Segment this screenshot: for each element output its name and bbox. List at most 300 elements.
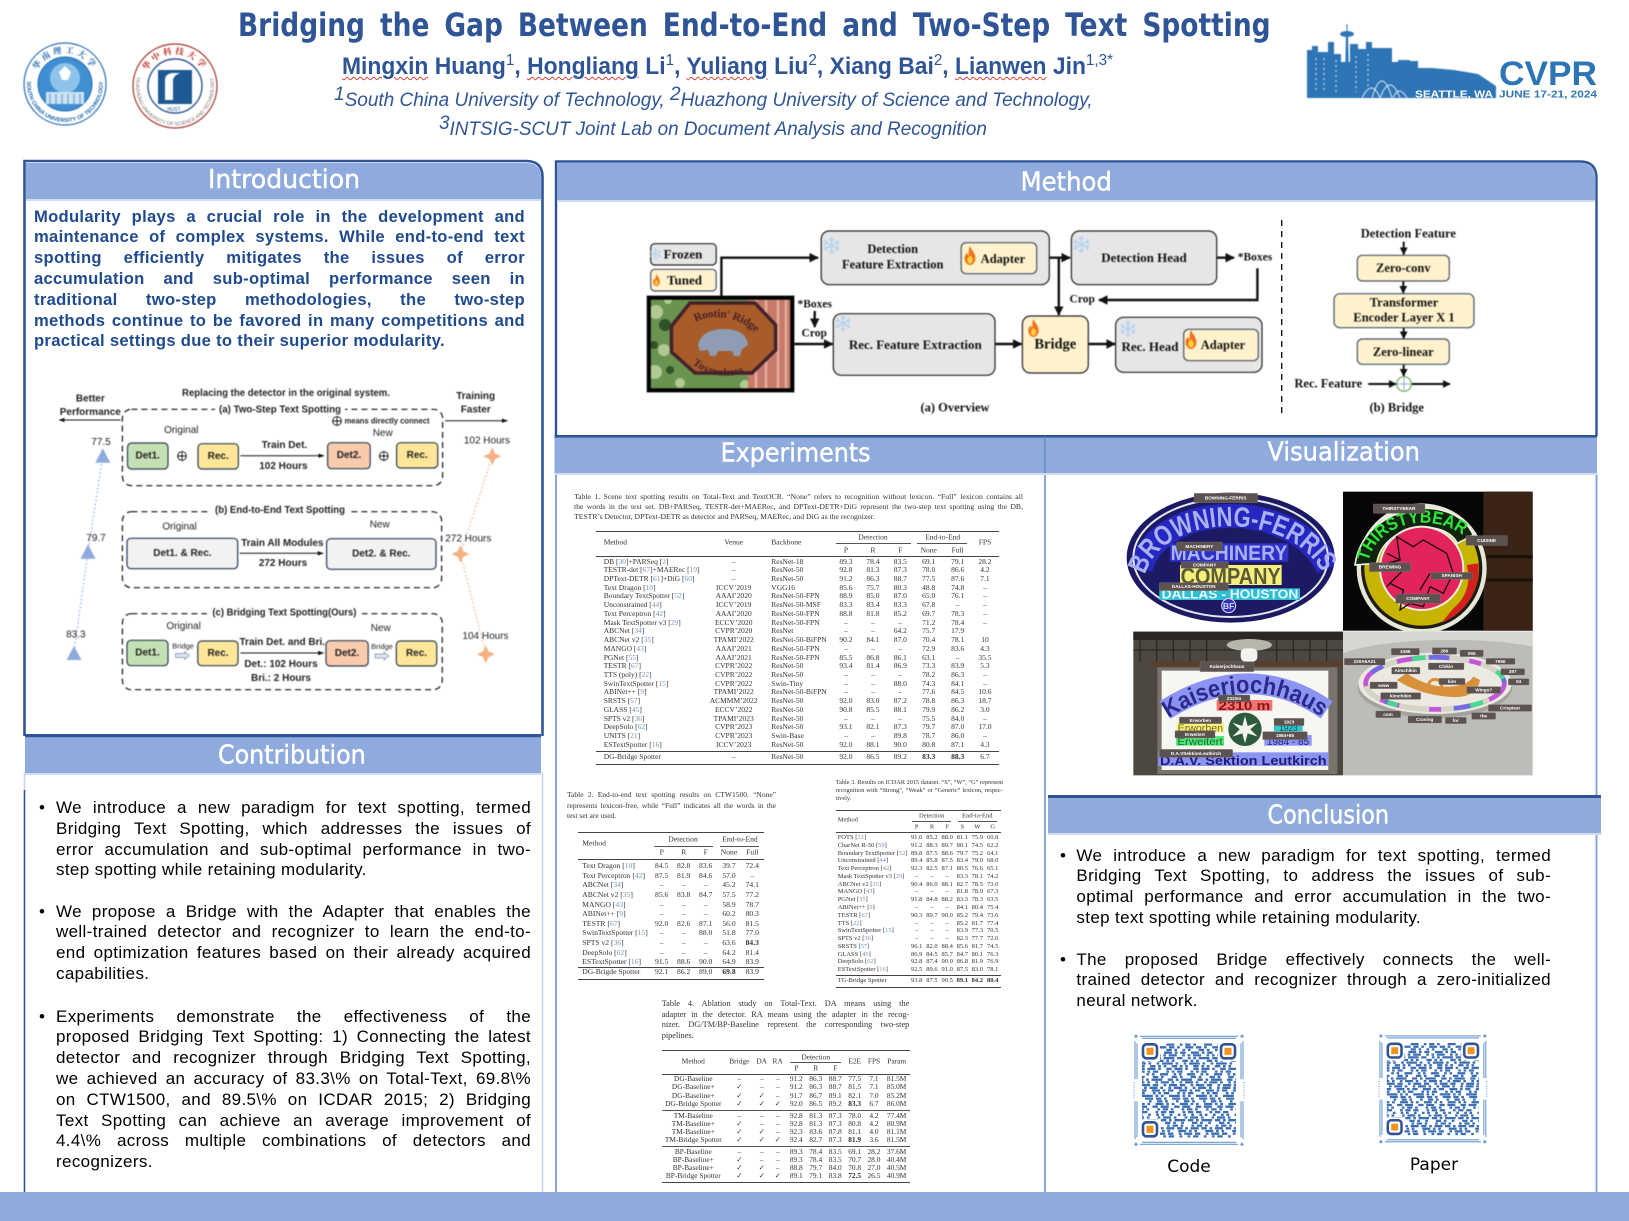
contribution bullet 1: • [39,798,45,817]
table 1: scene text spotting results: 87.0 [894,635,907,644]
detected labels: plate: Aimchikin [1395,668,1417,673]
table 3: ICDAR 2015 results: 68.0 [987,857,998,864]
heading: introduction: Introduction [208,165,360,195]
table 2: CTW1500 results: ESTextSpotter [16] [582,957,641,966]
table 1: scene text spotting results: – [732,557,736,566]
detected labels: plate: kim [1448,679,1456,684]
table 3: ICDAR 2015 results: GLASS [45] [838,951,871,958]
table 3: ICDAR 2015 results: 82.5 [926,865,938,872]
table 3: ICDAR 2015 results: 89.8 [911,850,922,857]
table 4: ablation study: DG-Baseline [674,1074,713,1083]
table 1: scene text spotting results: – [983,714,987,723]
table 1: scene text spotting results: TESTR’s Detector, DPText-DETR as detector and PARSeq, MAERec, and DiG as the recognizer. [574,512,875,521]
table 3: ICDAR 2015 results: 84.8 [926,896,938,903]
table 1: scene text spotting results: 89.2 [894,752,907,761]
table 4: ablation study: 86.7 [809,1091,822,1100]
table 3: ICDAR 2015 results: 96.1 [911,943,922,950]
table 4: ablation study: 26.5 [867,1171,880,1180]
table 1: scene text spotting results: 78.0 [922,565,935,574]
table 4: ablation study [662,999,910,1183]
table 1: scene text spotting results: – [732,752,736,761]
table 4: ablation study: DG-Baseline+ [672,1091,715,1100]
table 2: CTW1500 results: 63.6 [722,938,736,947]
table 2: CTW1500 results: 84.7 [699,890,712,899]
table 3: ICDAR 2015 results: – [915,873,918,880]
table 4: ablation study: 79.1 [809,1171,822,1180]
table 4: ablation study: 83.8 [829,1171,842,1180]
table 3: ICDAR 2015 results: Detection [919,812,944,820]
table 1: scene text spotting results: ESTextSpotter [16] [604,740,662,749]
table 4: ablation study: 81.5M [887,1074,906,1083]
caption: replacing the detector: Replacing the detector in the original system. [182,388,390,399]
table 4: ablation study: 91.7 [790,1091,803,1100]
table 4: ablation study: ✓ [759,1127,765,1136]
contribution bullet 2: end optimization features based on their already acquired [56,943,531,962]
table 4: ablation study: 28.2 [867,1147,880,1156]
table 3: ICDAR 2015 results: – [915,935,918,942]
contribution bullet 1: step spotting while retaining modularity. [56,860,367,879]
box: transformer encoder layer [1334,294,1474,328]
axis: training faster: Training [456,391,495,402]
table 3: ICDAR 2015 results: Unconstrained [44] [838,857,888,864]
table 2: CTW1500 results: 81.9 [677,871,690,880]
table 1: scene text spotting results: GLASS [45] [604,705,642,714]
arrows: bridge flow [1368,242,1450,384]
table 4: ablation study: Table 4. Ablation study on Total-Text. DA means using the [662,999,909,1008]
box (b) end-to-end text spotting: New [370,520,390,530]
image: Browning-Ferris sign: BF [1223,601,1234,611]
detected labels: Browning-Ferris: COMPANY [1193,562,1217,567]
table 1: scene text spotting results: – [844,731,848,740]
table 3: ICDAR 2015 results: – [915,904,918,911]
table 3: ICDAR 2015 results: – [930,927,934,934]
table 1: scene text spotting results: ResNet-50 [771,670,803,679]
table 1: scene text spotting results: 86.9 [894,661,907,670]
table 1: scene text spotting results: Method [604,538,627,546]
table 4: ablation study: 83.3 [848,1099,861,1108]
figure: replacing the detector comparison [59,388,510,690]
table 1: scene text spotting results: 18.7 [978,696,992,705]
table 4: ablation study: Method [682,1056,705,1065]
panel: contribution [24,734,542,1192]
table 4: ablation study: 92.0 [790,1099,803,1108]
logo: CVPR Seattle 2024 [1307,24,1598,100]
table 3: ICDAR 2015 results: 86.9 [911,951,922,958]
affiliations line 2: 3INTSIG-SCUT Joint Lab on Document Analysis and Recognition [439,112,987,140]
table 1: scene text spotting results: 4.3 [980,644,990,653]
table 4: ablation study: FPS [868,1056,880,1065]
table 1: scene text spotting results: 4.3 [980,740,990,749]
table 3: ICDAR 2015 results: 78.5 [972,881,983,888]
table 3: ICDAR 2015 results: 62.2 [987,842,998,849]
table 4: ablation study: 83.5 [829,1147,842,1156]
box: zero-conv [1357,255,1449,281]
table 3: ICDAR 2015 results: 79.7 [957,850,968,857]
table 3: ICDAR 2015 results: 76.3 [987,951,998,958]
table 2: CTW1500 results: F [704,848,708,856]
text block: introduction: maintenance of complex systems. While end-to-end text [34,227,525,246]
table 1: scene text spotting results: 87.0 [951,722,964,731]
table 1: scene text spotting results: Detection [858,533,888,542]
table 2: CTW1500 results: 89.0 [699,967,712,976]
box: transformer encoder layer: Transformer [1370,296,1439,310]
table 1: scene text spotting results: 79.1 [951,557,964,566]
table 4: ablation study: – [776,1155,780,1164]
box (c) bridging text spotting: Rec. [406,648,427,659]
table 3: ICDAR 2015 results: – [930,920,934,927]
logo: Huazhong University of Science and Technology: 华中科技大学 [142,46,207,70]
logo: South China University of Technology: 华南理工大学 [32,46,97,70]
detected labels: plate: kimchikin [1390,693,1412,698]
table 1: scene text spotting results: 86.6 [951,565,964,574]
detected labels: plate: the [1480,713,1488,718]
table 1: scene text spotting results: ResNet-50-BiFPN [771,635,827,644]
table 3: ICDAR 2015 results: 63.5 [987,896,998,903]
table 1: scene text spotting results: 88.3 [951,752,964,761]
table 1: scene text spotting results: ResNet-50 [771,705,803,714]
table 3: ICDAR 2015 results: 87.5 [957,966,968,973]
table 4: ablation study: 89.1 [829,1091,842,1100]
table 1: scene text spotting results: 17.0 [978,722,992,731]
table 1: scene text spotting results: 73.3 [922,661,935,670]
table 4: ablation study: 40.9M [887,1171,906,1180]
table 4: ablation study: 78.0 [848,1111,861,1120]
table 4: ablation study: 89.2 [829,1099,842,1108]
table 2: CTW1500 results: 69.8 [722,967,736,976]
table 2: CTW1500 results: – [660,900,664,909]
heading: visualization: Visualization [1267,438,1420,468]
table 1: scene text spotting results: 78.3 [951,609,964,618]
detected labels: Browning-Ferris: DALLAS-HOUSTON [1172,584,1216,589]
table 1: scene text spotting results: CVPR’2022 [715,661,752,670]
table 1: scene text spotting results: 84.1 [866,635,880,644]
table 4: ablation study: 4.2 [869,1111,879,1120]
table 4: ablation study: 91.2 [790,1082,803,1091]
table 1: scene text spotting results: ResNet-50-MSF [771,600,821,609]
table 2: CTW1500 results: SwinTextSpotter [15] [582,928,648,937]
table 1: scene text spotting results: – [898,714,902,723]
table 3: ICDAR 2015 results: 65.1 [987,865,998,872]
table 3: ICDAR 2015 results: 75.4 [987,904,998,911]
table 4: ablation study: 7.0 [869,1091,879,1100]
table 1: scene text spotting results: – [871,644,875,653]
box (a) two-step text spotting: Rec. [208,451,229,462]
table 4: ablation study: BP-Baseline+ [673,1155,714,1164]
table 3: ICDAR 2015 results: – [946,927,949,934]
table 4: ablation study: 3.6 [869,1135,879,1144]
table 4: ablation study: 86.5 [809,1099,822,1108]
table 3: ICDAR 2015 results: 77.3 [972,927,983,934]
table 1: scene text spotting results: 71.2 [922,618,935,627]
table 1: scene text spotting results: ResNet-50 [771,714,803,723]
table 1: scene text spotting results: Boundary TextSpotter [52] [604,591,684,600]
table 3: ICDAR 2015 results: F [945,823,949,830]
table 3: ICDAR 2015 results: 70.5 [987,927,998,934]
table 1: scene text spotting results: 85.2 [894,609,907,618]
table 1: scene text spotting results: R [870,545,876,554]
box (a) two-step text spotting: Rec. [407,450,428,461]
image: Browning-Ferris sign: COMPANY [1181,563,1281,589]
table 4: ablation study: 89.3 [790,1155,803,1164]
table 1: scene text spotting results: VGG16 [771,583,795,592]
table 2: CTW1500 results: 84.6 [699,871,712,880]
table 3: ICDAR 2015 results: Text Perceptron [42] [838,865,891,872]
image: Kaiserjochhaus sign: 2310 m [1218,699,1270,713]
table 4: ablation study: – [737,1074,741,1083]
table 3: ICDAR 2015 results: 73.6 [987,912,998,919]
table 2: CTW1500 results: – [660,928,664,937]
table 1: scene text spotting results: 89.8 [894,731,907,740]
box (b) end-to-end text spotting: 272 Hours [259,558,308,569]
box (a) two-step text spotting: Det2. [337,450,361,461]
table 3: ICDAR 2015 results: 80.5 [957,865,968,872]
table 1: scene text spotting results: 83.9 [951,661,964,670]
table 3: ICDAR 2015 results: 92.8 [911,958,922,965]
table 3: ICDAR 2015 results: 85.2 [957,912,968,919]
table 1: scene text spotting results: – [871,618,875,627]
table 1: scene text spotting results: – [871,626,875,635]
table 3: ICDAR 2015 results: TESTR [67] [838,912,870,919]
chart: training-time stars: 272 Hours [445,534,491,544]
detected labels: plate: www [1377,683,1389,688]
table 1: scene text spotting results: ECCV’2022 [715,705,752,714]
table 3: ICDAR 2015 results: 67.3 [987,888,998,895]
table 4: ablation study: ✓ [759,1163,765,1172]
table 3: ICDAR 2015 results: 90.5 [941,977,953,984]
conclusion bullet 2 [1060,950,1551,1010]
table 1: scene text spotting results: – [956,600,960,609]
table 2: CTW1500 results: – [660,880,664,889]
table 1: scene text spotting results: ResNet-50-FPN [771,591,820,600]
table 1: scene text spotting results: 28.2 [978,557,992,566]
table 1: scene text spotting results: 48.8 [922,583,935,592]
image: Kaiserjochhaus sign: D.A.V. Sektion Leutkirch [1160,753,1327,768]
table 3: ICDAR 2015 results: 74.5 [987,943,998,950]
table 2: CTW1500 results: TESTR [67] [582,919,620,928]
conclusion bullet 2: trained detector and recognizer through a zero-initialized [1076,970,1551,989]
table 4: ablation study: 81.5 [848,1082,861,1091]
table 2: CTW1500 results: 72.4 [746,861,759,870]
table 1: scene text spotting results: Full [952,545,964,554]
box: rec. head with adapter [1116,317,1262,372]
table 3: ICDAR 2015 results: 80.1 [957,842,968,849]
table 3: ICDAR 2015 results: Mask TextSpotter v3 [29] [838,873,904,880]
table 1: scene text spotting results: 77.5 [922,574,935,583]
table 2: CTW1500 results: 60.2 [722,909,736,918]
table 1: scene text spotting results: Swin-Tiny [771,679,803,688]
table 2: CTW1500 results: – [660,938,664,947]
table 1: scene text spotting results: 79.9 [922,705,935,714]
figure: bridge structure [1294,226,1474,414]
table 3: ICDAR 2015 results: 88.6 [941,850,953,857]
table 1: scene text spotting results: TPAMI’2023 [714,714,754,723]
label: code: Code [1167,1157,1211,1177]
table 1: scene text spotting results: 63.1 [922,652,935,662]
table 1: scene text spotting results: Mask TextSpotter v3 [29] [604,618,681,627]
table 1: scene text spotting results: 86.3 [951,670,964,679]
table 4: ablation study: 4.0 [869,1127,879,1136]
table 1: scene text spotting results: F [898,545,902,554]
table 1: scene text spotting results: – [983,731,987,740]
table 3: ICDAR 2015 results: 88.3 [926,842,938,849]
table 4: ablation study: – [737,1147,741,1156]
table 3: ICDAR 2015 results: – [915,888,918,895]
caption: (a) overview: (a) Overview [920,400,990,414]
table 1: scene text spotting results: 80.8 [922,740,935,749]
table 2: CTW1500 results: – [682,928,686,937]
table 4: ablation study: 91.2 [790,1074,803,1083]
table 3: ICDAR 2015 results: MANGO [43] [838,888,875,895]
table 4: ablation study: 4.2 [869,1119,879,1128]
table 4: ablation study: ✓ [736,1091,742,1100]
table 1: scene text spotting results: ICCV’2019 [716,600,751,609]
box: transformer encoder layer: Encoder Layer X 1 [1353,311,1455,325]
table 3: ICDAR 2015 results: 64.1 [987,850,998,857]
table 4: ablation study: 82.1 [848,1091,861,1100]
table 4: ablation study: Bridge [729,1056,749,1065]
table 4: ablation study: – [737,1111,741,1120]
box (c) bridging text spotting: Det1. [135,648,160,658]
table 3: ICDAR 2015 results: 78.1 [987,966,998,973]
table 4: ablation study: Detection [801,1052,830,1061]
table 1: scene text spotting results: – [871,731,875,740]
table 1: scene text spotting results: DG-Bridge Spotter [604,752,661,761]
table 1: scene text spotting results: 86.8 [866,652,880,662]
table 2: CTW1500 results: 83.9 [746,957,759,966]
table 1: scene text spotting results: 93.1 [839,722,853,731]
panel: conclusion [1048,795,1601,1192]
table 3: ICDAR 2015 results: 76.6 [972,865,983,872]
table 4: ablation study: 40.5M [887,1163,906,1172]
axis: training faster [445,391,508,421]
table 3: ICDAR 2015 results: recognition with “Strong”, “Weak” or “Generic” lexicon, respec- [836,787,1003,794]
table 4: ablation study: 86.3 [809,1074,822,1083]
table 1: scene text spotting results: 67.8 [922,600,935,609]
table 3: ICDAR 2015 results: 87.4 [926,958,938,965]
contribution bullet 3: • [39,1007,45,1026]
table 3: ICDAR 2015 results: 85.2 [926,834,938,841]
table 2: CTW1500 results: – [660,909,664,918]
table 2: CTW1500 results: 92.1 [655,967,668,976]
box: adapter (detector): Adapter [981,252,1026,266]
table 2: CTW1500 results: 81.4 [746,948,759,957]
table 3: ICDAR 2015 results: 89.7 [941,842,953,849]
table 3: ICDAR 2015 results: – [946,904,949,911]
table 2: CTW1500 results: 83.9 [746,967,759,976]
table 2: CTW1500 results: 64.2 [722,948,736,957]
table 2: CTW1500 results: – [682,900,686,909]
table 3: ICDAR 2015 results: Method [838,816,858,823]
text block: introduction [34,207,525,350]
labels: boxes and crop (left): Crop [802,327,827,339]
contribution bullet 1: Bridging Text Spotting, which addresses the issues of [56,819,531,838]
table 3: ICDAR 2015 results: 91.0 [911,834,922,841]
table 2: CTW1500 results: – [704,948,708,957]
detected labels: plate: Chikin [1439,664,1453,669]
table 4: ablation study: 81.3 [809,1119,822,1128]
table 1: scene text spotting results: AAAI’2021 [716,644,752,653]
table 3: ICDAR 2015 results: 83.4 [957,857,968,864]
logo: Huazhong University of Science and Technology: HUST [167,107,181,113]
box (c) bridging text spotting: Train Det. and Bri. [240,637,325,648]
table 1: scene text spotting results: 65.0 [922,591,935,600]
table 1: scene text spotting results: 78.8 [922,696,935,705]
table 4: ablation study: 70.8 [848,1163,861,1172]
conclusion bullet 2: neural network. [1076,991,1198,1010]
table 4: ablation study: TM-Baseline [674,1111,713,1120]
table 2: CTW1500 results: 88.6 [677,957,690,966]
detected labels: Kaiserjochhaus: 1923 [1284,719,1295,724]
table 4: ablation study: 86.3 [809,1082,822,1091]
table 3: ICDAR 2015 results: 90.4 [911,881,922,888]
table 3: ICDAR 2015 results: 90.0 [941,958,953,965]
table 1: scene text spotting results: ResNet-50-FPN [771,652,820,662]
table 1: scene text spotting results: ResNet-50-BiFPN [771,687,827,696]
table 2: CTW1500 results: – [704,909,708,918]
contribution bullet 3: we achieved an accuracy of 83.3\% on Total-Text, 69.8\% [56,1069,531,1088]
table 1: scene text spotting results: 6.7 [980,752,990,761]
chart: performance triangles: 83.3 [66,630,86,640]
table 3: ICDAR 2015 results: 84.2 [972,977,983,984]
table 3: ICDAR 2015 results: 87.1 [941,865,953,872]
table 3: ICDAR 2015 results: 77.7 [972,935,983,942]
table 4: ablation study: ✓ [736,1127,742,1136]
table 1: scene text spotting results: 85.5 [866,705,880,714]
table 3: ICDAR 2015 results: 93.8 [911,977,922,984]
box (a) two-step text spotting: Original [164,425,199,436]
table 3: ICDAR 2015 results: – [930,935,934,942]
text block: introduction: traditional two-step methodologies, the two-step [34,290,525,309]
table 1: scene text spotting results: Text Dragon [10] [604,583,656,592]
labels: boxes and crop (left) [797,298,832,339]
table 4: ablation study: 85.2M [887,1091,906,1100]
table 2: CTW1500 results: 57.0 [722,871,736,880]
table 2: CTW1500 results: 77.2 [746,890,759,899]
table 1: scene text spotting results: – [898,644,902,653]
text block: introduction: methods continue to be favored in many competitions and [34,311,525,330]
table 3: ICDAR 2015 results: 60.8 [987,834,998,841]
table 1: scene text spotting results: P [844,545,848,554]
table 1: scene text spotting results: ResNet-50 [771,696,803,705]
contribution bullet 3: 4.4\% across multiple combinations of detectors and [56,1131,531,1150]
table 1: scene text spotting results: – [983,591,987,600]
table 1: scene text spotting results: TESTR [67] [604,661,641,670]
table 1: scene text spotting results: ResNet-50-FPN [771,618,820,627]
table 4: ablation study: 80.9M [887,1119,906,1128]
table 4: ablation study: 77.4M [887,1111,906,1120]
table 1: scene text spotting results: 93.4 [839,661,853,670]
image: Kaiserjochhaus sign: 1923 [1279,723,1298,733]
table 4: ablation study: 77.5 [848,1074,861,1083]
table 4: ablation study: 89.3 [790,1147,803,1156]
table 4: ablation study: ✓ [759,1099,765,1108]
table 1: scene text spotting results: – [844,679,848,688]
table 3: ICDAR 2015 results: 74.2 [987,873,998,880]
detected labels: ThirstyBear: SPANISH [1441,573,1462,578]
box (c) bridging text spotting: Rec. [207,648,229,659]
table 3: ICDAR 2015 results: 86.0 [926,881,938,888]
table 3: ICDAR 2015 results: 89.7 [926,912,938,919]
table 2: CTW1500 results: 80.3 [746,909,759,918]
table 1: scene text spotting results: Swin-Base [771,731,804,740]
heading: contribution: Contribution [218,740,366,770]
table 3: ICDAR 2015 results: 81.8 [957,888,968,895]
logo: South China University of Technology [22,42,108,126]
arrows: overview connections [721,258,1257,344]
detected labels: plate: 397 [1509,669,1517,674]
table 4: ablation study: 92.3 [790,1127,803,1136]
table 1: scene text spotting results: 88.7 [894,574,907,583]
